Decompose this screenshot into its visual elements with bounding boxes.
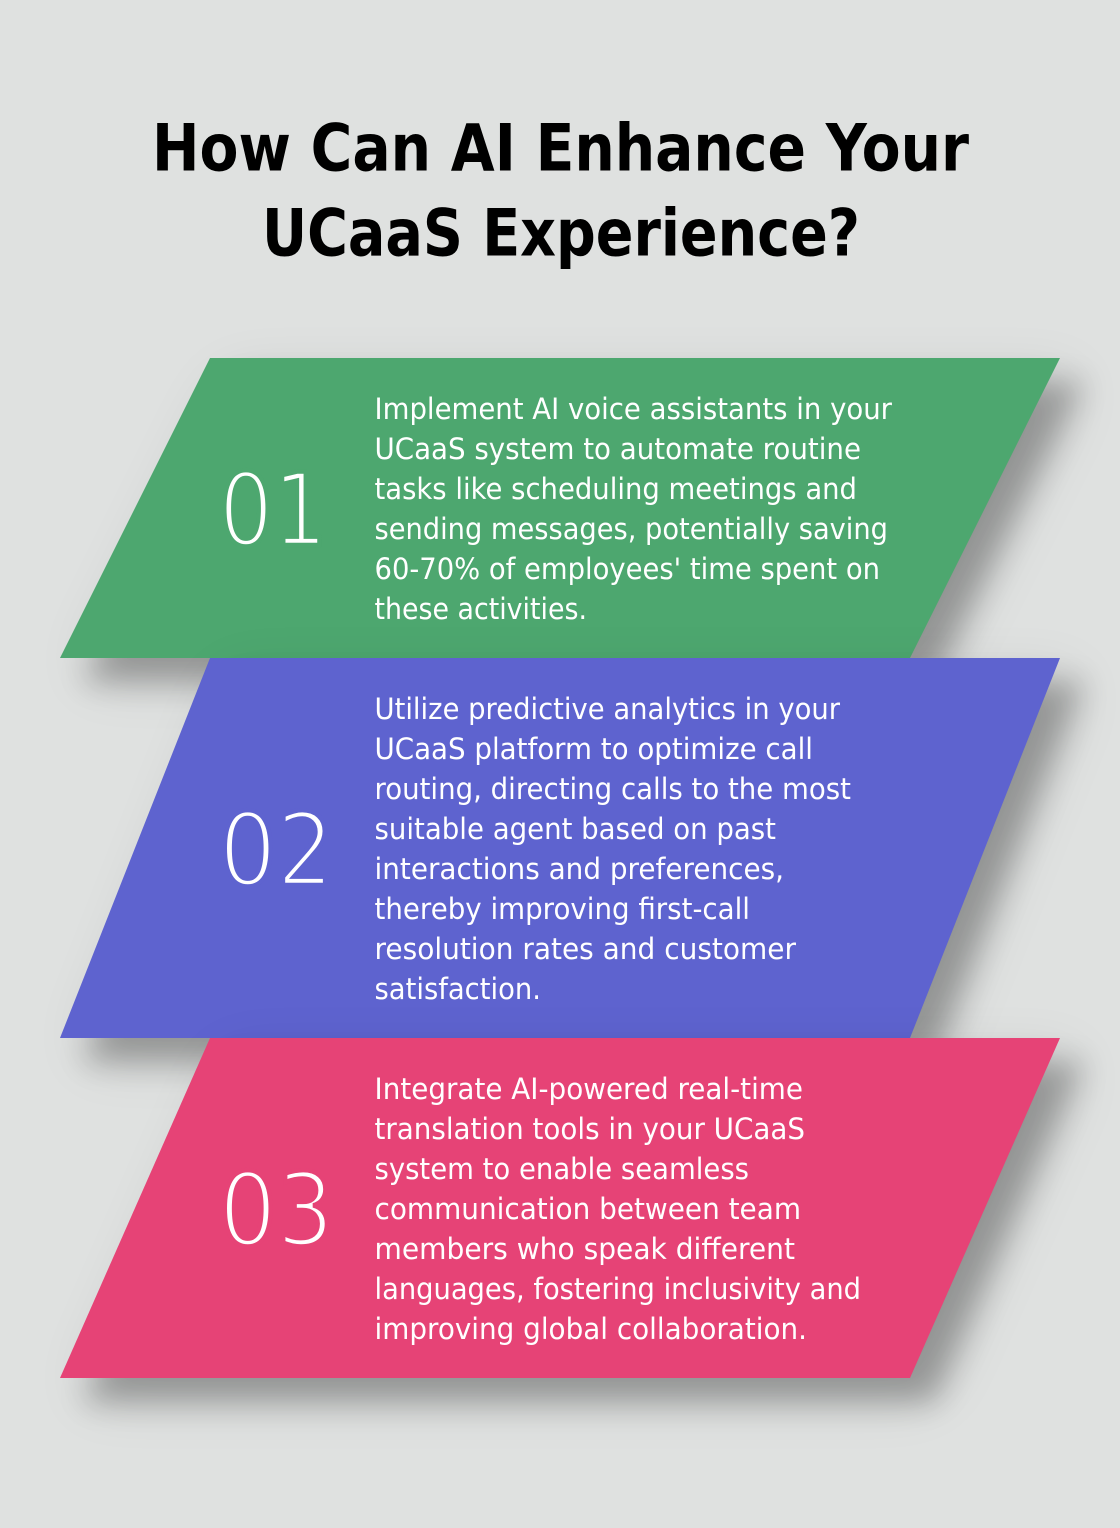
- text: step 02 description: interactions and preferences,: [374, 852, 784, 886]
- text: step 02 description: thereby improving first-call: [374, 892, 750, 926]
- text: step 02 description: suitable agent based on past: [374, 812, 776, 846]
- text: step 02 description: Utilize predictive analytics in your: [374, 692, 840, 726]
- panel: step 03: [60, 1038, 1084, 1402]
- step number 03: 03: [219, 1151, 334, 1269]
- step number 02: 02: [219, 791, 334, 909]
- text: step 01 description: tasks like scheduling meetings and: [374, 472, 857, 506]
- text: step 03 description: system to enable seamless: [374, 1152, 749, 1186]
- text: step 03 description: languages, fostering inclusivity and: [374, 1272, 861, 1306]
- text: step 02 description: UCaaS platform to optimize call: [374, 732, 813, 766]
- step number 01: 01: [219, 451, 327, 569]
- text: step 01 description: UCaaS system to automate routine: [374, 432, 861, 466]
- text: step 03 description: communication between team: [374, 1192, 801, 1226]
- text: step 02 description: resolution rates and customer: [374, 932, 796, 966]
- text: step 03 description: members who speak different: [374, 1232, 795, 1266]
- panel: step 02: [60, 658, 1084, 1062]
- title: How Can AI Enhance Your: [152, 112, 969, 186]
- text: step 03 description: translation tools in your UCaaS: [374, 1112, 805, 1146]
- text: step 01 description: these activities.: [374, 592, 587, 626]
- text: step 01 description: Implement AI voice assistants in your: [374, 392, 892, 426]
- text: step 01 description: sending messages, potentially saving: [374, 512, 888, 546]
- text: step 02 description: [374, 692, 851, 1006]
- text: step 03 description: improving global collaboration.: [374, 1312, 807, 1346]
- text: step 03 description: Integrate AI-powered real-time: [374, 1072, 803, 1106]
- title: UCaaS Experience?: [262, 196, 860, 272]
- text: step 01 description: [374, 392, 892, 626]
- text: step 02 description: routing, directing calls to the most: [374, 772, 851, 806]
- title: [152, 112, 969, 272]
- text: step 03 description: [374, 1072, 861, 1346]
- text: step 01 description: 60-70% of employees' time spent on: [374, 552, 880, 586]
- text: step 02 description: satisfaction.: [374, 972, 541, 1006]
- panel: step 01: [60, 358, 1084, 682]
